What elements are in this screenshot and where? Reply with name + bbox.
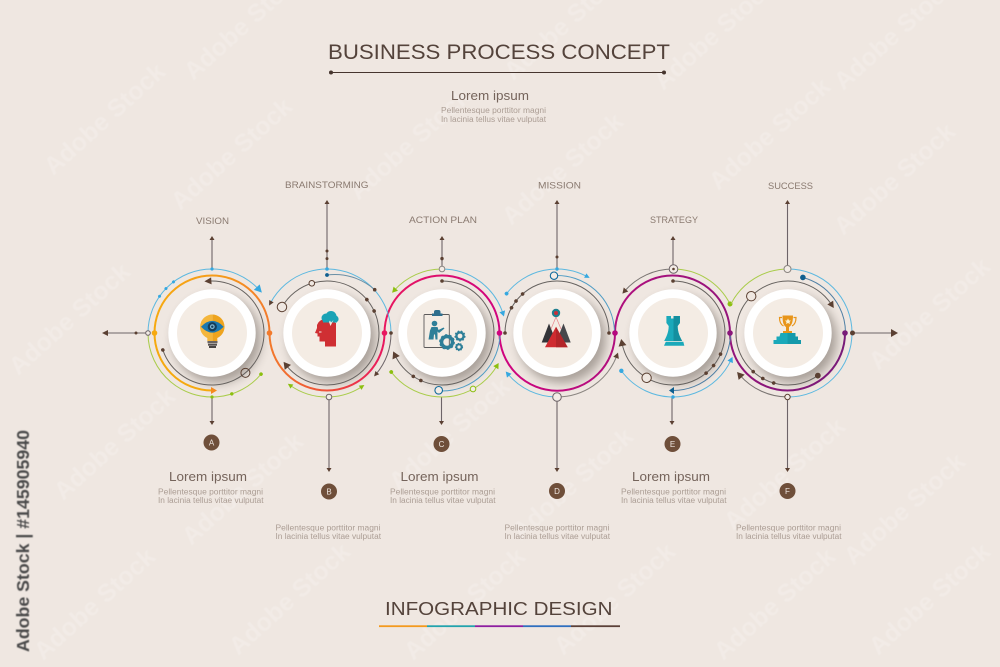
text block A: Lorem ipsum <box>169 470 247 484</box>
text block D <box>504 524 611 541</box>
label: strategy: STRATEGY <box>650 215 699 226</box>
watermark pattern: Adobe Stock <box>166 92 298 216</box>
text block C: In lacinia tellus vitae vulputat <box>390 496 496 505</box>
label: vision: VISION <box>196 216 229 227</box>
icon: trophy on podium <box>774 316 801 344</box>
icon: chess rook <box>664 316 684 346</box>
text block E <box>621 470 727 505</box>
text block F <box>736 524 842 541</box>
text block F: In lacinia tellus vitae vulputat <box>736 532 842 541</box>
icon: head with cloud <box>315 311 339 346</box>
disc shadows <box>173 295 837 383</box>
text block B: Pellentesque porttitor magni <box>276 524 381 532</box>
text block D: Pellentesque porttitor magni <box>504 524 610 532</box>
step 1 rings <box>122 243 302 423</box>
title: BUSINESS PROCESS CONCEPT <box>328 41 670 64</box>
badge E <box>664 436 680 452</box>
step 4 rings <box>467 243 647 423</box>
badge E: E <box>670 440 675 449</box>
step 6 rings <box>702 247 874 419</box>
text block B <box>276 524 382 541</box>
watermark pattern: Adobe Stock <box>549 537 681 661</box>
watermark pattern: Adobe Stock <box>384 372 516 496</box>
title underline <box>329 70 666 74</box>
text block B: In lacinia tellus vitae vulputat <box>276 532 382 541</box>
badge A <box>204 434 220 450</box>
watermark pattern: Adobe Stock <box>497 107 629 231</box>
process line junction dots <box>152 330 855 336</box>
watermark pattern: Adobe Stock <box>224 537 356 661</box>
watermark pattern: Adobe Stock <box>864 537 996 661</box>
step discs <box>168 289 832 377</box>
footer heading: INFOGRAPHIC DESIGN <box>385 598 612 619</box>
watermark pattern: Adobe Stock <box>399 542 531 666</box>
watermark pattern: Adobe Stock <box>49 382 181 506</box>
stock id side text: Adobe Stock | #145905940 <box>13 430 33 652</box>
text block A <box>158 470 264 505</box>
watermark pattern: Adobe Stock <box>704 72 836 196</box>
badge F: F <box>785 487 790 496</box>
watermark pattern: Adobe Stock <box>29 542 161 666</box>
badge D <box>549 483 565 499</box>
watermark pattern: Adobe Stock <box>864 252 996 376</box>
text block A: In lacinia tellus vitae vulputat <box>158 496 264 505</box>
watermark pattern: Adobe Stock <box>839 447 971 571</box>
footer colour bar <box>379 625 620 627</box>
intro text block <box>441 89 547 124</box>
badge C <box>434 436 450 452</box>
watermark pattern: Adobe Stock <box>709 542 841 666</box>
text block E: In lacinia tellus vitae vulputat <box>621 496 727 505</box>
label: mission: MISSION <box>538 180 581 192</box>
watermark pattern: Adobe Stock <box>344 82 476 206</box>
watermark pattern: Adobe Stock <box>39 57 171 181</box>
watermark pattern: Adobe Stock <box>719 412 851 536</box>
badge C: C <box>439 440 445 449</box>
badge A: A <box>209 438 215 448</box>
intro text block: Lorem ipsum <box>451 89 529 103</box>
text block D: In lacinia tellus vitae vulputat <box>504 532 611 541</box>
label: brainstorming: BRAINSTORMING <box>285 180 368 191</box>
text block A: Pellentesque porttitor magni <box>158 488 263 496</box>
watermark pattern: Adobe Stock <box>507 422 639 546</box>
label: action plan: ACTION PLAN <box>409 215 477 226</box>
watermark pattern: Adobe Stock <box>829 117 961 241</box>
step 5 rings <box>583 243 763 423</box>
icon: clipboard with presenter and gears <box>424 310 465 351</box>
text block E: Lorem ipsum <box>632 470 710 484</box>
icon: eye light bulb <box>200 314 225 348</box>
intro text block: Pellentesque porttitor magni <box>441 106 546 115</box>
step 3 rings <box>352 243 532 423</box>
badge D: D <box>554 487 560 496</box>
icon: mountains with target <box>542 309 571 347</box>
intro text block: In lacinia tellus vitae vulputat <box>441 115 547 124</box>
text block C <box>390 470 496 505</box>
watermark pattern: Adobe Stock <box>177 427 309 551</box>
badge F <box>780 483 796 499</box>
main process line <box>154 276 845 394</box>
watermark pattern: Adobe Stock <box>4 257 136 381</box>
badge B: B <box>326 488 332 496</box>
text block F: Pellentesque porttitor magni <box>736 524 841 532</box>
text block C: Lorem ipsum <box>400 470 478 484</box>
badge B <box>321 484 337 500</box>
step 2 rings <box>238 244 416 422</box>
label: success: SUCCESS <box>768 181 813 192</box>
connector stems <box>102 200 898 472</box>
text block E: Pellentesque porttitor magni <box>621 488 726 496</box>
text block C: Pellentesque porttitor magni <box>390 488 495 496</box>
